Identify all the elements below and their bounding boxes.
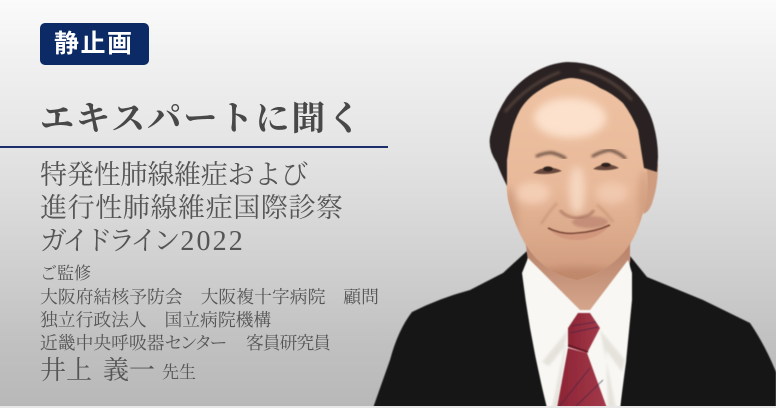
affiliation line 3 role: 客員研究員 — [246, 333, 330, 353]
supervision label: ご監修 — [40, 264, 91, 283]
title line 1: 特発性肺線維症および — [40, 160, 308, 190]
necktie — [557, 313, 607, 408]
nose — [560, 210, 594, 218]
hair — [490, 62, 658, 186]
smile folds — [541, 203, 613, 224]
face — [506, 71, 647, 280]
supervisor name — [40, 356, 196, 385]
hair highlight — [505, 70, 632, 112]
face shading — [502, 98, 650, 285]
title — [40, 160, 344, 257]
supervisor affiliation — [40, 264, 379, 353]
badge label: 静止画 — [54, 30, 134, 58]
name: 井上 — [40, 356, 92, 385]
shirt and collar — [522, 258, 632, 408]
honorific: 先生 — [162, 363, 196, 382]
jacket — [373, 251, 776, 408]
portrait photo of Dr. Inoue — [373, 61, 776, 406]
affiliation line 3: 近畿中央呼吸器センター — [40, 333, 225, 353]
eyes — [533, 163, 619, 174]
affiliation line 2: 独立行政法人 国立病院機構 — [40, 310, 271, 330]
bottom edge — [0, 406, 776, 408]
given name: 義一 — [103, 356, 155, 385]
collar shadow — [542, 330, 625, 408]
upper lip shade — [572, 216, 608, 228]
title line 2: 進行性肺線維症国際診察 — [40, 193, 344, 223]
neck — [526, 240, 630, 312]
affiliation line 1: 大阪府結核予防会 大阪複十字病院 顧問 — [40, 287, 379, 307]
eyebrows — [537, 150, 625, 158]
mouth — [548, 225, 610, 240]
badge: 静止画 — [40, 23, 149, 65]
heading rule — [0, 146, 388, 148]
heading: エキスパートに聞く — [40, 101, 363, 138]
right ear — [643, 163, 658, 214]
title line 3: ガイドライン2022 — [40, 226, 245, 257]
